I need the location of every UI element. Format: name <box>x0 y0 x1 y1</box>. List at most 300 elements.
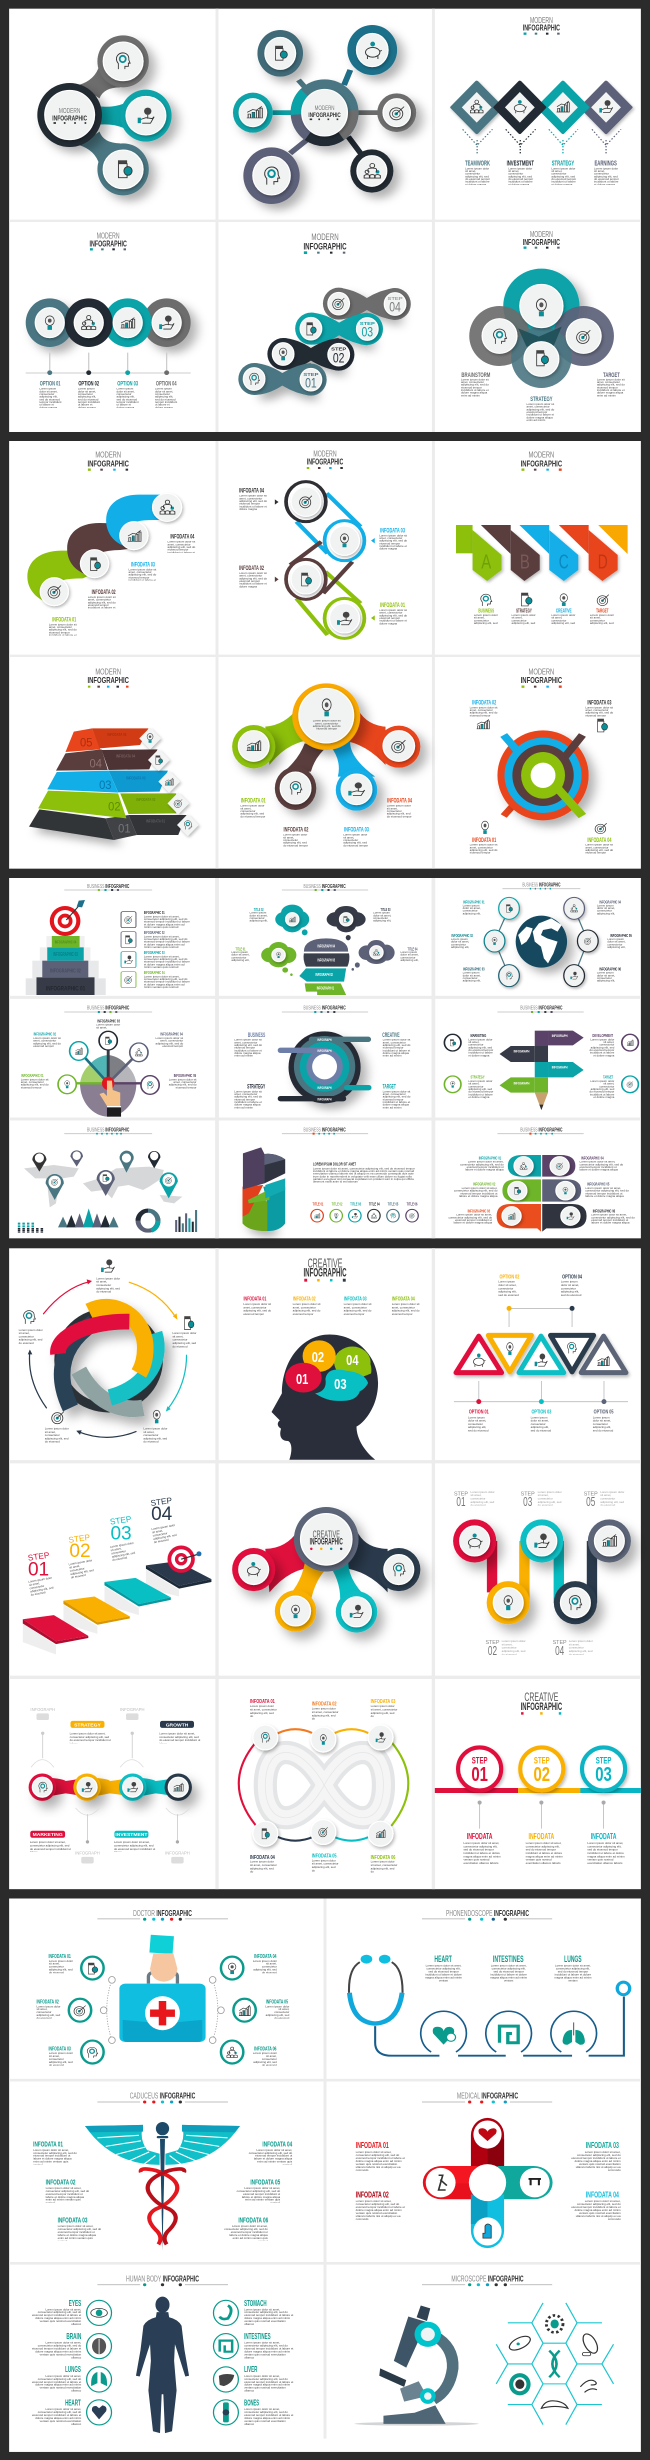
panel: creative hub <box>232 1507 420 1633</box>
panel: woven ribbon star: Lorem ipsum dolor sit amet, consectetur adipiscing elit, sed do eiusmod <box>19 1329 43 1344</box>
title: MEDICAL INFOGRAPHIC <box>457 2091 518 2101</box>
panel: six speech tabs: Lorem ipsum dolor sit amet, consectetur adipiscing elit, sed do eiusmod tempor incididunt ut labore et dolore magna aliqua <box>449 1214 492 1224</box>
panel: doctor bag: INFODATA 01 <box>49 1954 71 1960</box>
panel: woven ribbon star: Lorem ipsum dolor sit amet, consectetur adipiscing elit, sed do eiusmod <box>143 1427 167 1443</box>
icon: body silhouette <box>136 2297 189 2433</box>
chart: people row <box>19 1223 42 1233</box>
panel: caduceus: INFODATA 04 <box>262 2140 293 2148</box>
panel: isometric steps: 03 <box>110 1523 132 1544</box>
panel: medical cross: INFODATA 01 <box>356 2141 389 2150</box>
panel: head with thought clouds: TITLE 03 <box>381 907 391 913</box>
panel: four step dumbbells: 04 <box>389 300 401 315</box>
legend: six mini icons: TITLE 02 <box>332 1202 343 1207</box>
panel: four step dumbbells: STEP <box>360 321 375 327</box>
title: INFOGRAPHIC <box>521 676 562 686</box>
title <box>64 884 152 890</box>
panel: medical cross: Lorem ipsum dolor sit amet, consectetur adipiscing elit, sed do eiusmod tempor incididunt ut labore et dolore magna aliqua enim ad minim veniam quis nostrud exercitation ullamco laboris nisi ut aliquip ex ea commodo <box>571 2151 621 2172</box>
panel: pencil signpost: TARGET <box>603 1075 613 1080</box>
panel: five-lobed hub <box>232 683 420 849</box>
panel: four step dumbbells: STEP <box>387 296 403 302</box>
chart: donut <box>138 1211 158 1231</box>
panel: five-lobed hub: INFODATA 01 <box>241 797 266 804</box>
panel: infinity loop: Lorem ipsum dolor sit amet, consectetur adipiscing elit, sed do <box>312 1708 339 1720</box>
title: BUSINESS INFOGRAPHIC <box>303 1127 346 1133</box>
panel: doctor bag: INFODATA 05 <box>266 2000 289 2005</box>
title: MODERN <box>311 232 339 243</box>
title <box>422 2091 552 2103</box>
title: INFOGRAPHIC <box>87 676 129 686</box>
panel: folded ribbon ABCD: STRATEGY <box>516 609 532 614</box>
panel: head with brain: INFODATA 03 <box>344 1297 367 1303</box>
panel: human body: Lorem ipsum dolor sit amet, consectetur adipiscing elit, sed do eiusmod tempor incididunt ut labore et dolore magna aliqua enim ad minim veniam quis nostrud exercitation ullamco <box>244 2408 293 2425</box>
panel: chain of belts: INFODATA 04 <box>239 487 264 494</box>
title: HUMAN BODY INFOGRAPHIC <box>126 2274 199 2283</box>
panel: stethoscope: Lorem ipsum dolor sit amet, consectetur adipiscing elit, sed do eiusmod tempor incididunt ut labore et dolore magna aliqua enim ad minim veniam <box>425 1965 462 1982</box>
title <box>97 1908 228 1921</box>
title <box>521 1691 562 1713</box>
panel: doctor bag <box>36 1908 289 2066</box>
panel: head with thought clouds: TITLE 04 <box>407 947 418 952</box>
panel: infinity loop: INFODATA 01 <box>250 1699 275 1705</box>
title: INFOGRAPHIC <box>521 459 562 469</box>
panel: infinity loop: Lorem ipsum dolor sit amet, consectetur adipiscing elit, sed do <box>371 1705 397 1718</box>
panel: six-node hub: INFOGRAPHIC <box>308 111 341 119</box>
chart: bars <box>176 1210 196 1232</box>
panel: overlapping circles: STRATEGY <box>530 395 553 403</box>
panel: head with brain: Lorem ipsum dolor sit amet, consectetur adipiscing elit, sed do eiusmod tempor <box>344 1303 371 1316</box>
panel: concentric rings with bars: Lorem ipsum dolor sit amet, consectetur adipiscing elit, sed do eiusmod tempor incididunt ut labore et dolore magna aliqua enim ad minim <box>383 1091 410 1109</box>
panel: three steps on a line <box>435 1691 641 1873</box>
panel: medical cross: INFODATA 04 <box>586 2190 619 2199</box>
title <box>97 2091 228 2103</box>
panel: alternating triangles: OPTION 03 <box>531 1410 552 1416</box>
title <box>521 451 562 470</box>
icons: organ glyphs <box>91 2305 234 2422</box>
panel: infinity loop: INFODATA 05 <box>312 1853 337 1859</box>
title: INFOGRAPHIC <box>303 241 347 252</box>
panel: human body <box>30 2274 296 2433</box>
title <box>97 2274 228 2286</box>
panel: five-lobed hub: Lorem ipsum dolor sit amet, consectetur adipiscing elit, sed do eiusmod tempor <box>343 834 368 847</box>
title: BUSINESS INFOGRAPHIC <box>522 882 561 888</box>
panel: caduceus: INFODATA 05 <box>250 2178 281 2186</box>
title: MODERN <box>530 230 553 239</box>
panel: snake path of five steps: STEP <box>521 1491 535 1497</box>
panel: infinity loop <box>239 1699 408 1873</box>
icon: medical bag held by hand <box>119 1935 206 2042</box>
panel: isometric steps: STEP <box>150 1495 173 1508</box>
panel: four diamonds: STRATEGY <box>552 159 574 167</box>
panel: four-node line with pills: INFOGRAPH <box>165 1850 190 1855</box>
panel: layered pyramid: 04 <box>90 757 102 770</box>
icon: pressing hand <box>99 1081 121 1117</box>
panel: isometric steps: Lorem ipsum dolor sit amet, consectetur adipiscing elit, sed do eiusmod <box>151 1524 177 1544</box>
panel: pencil signpost: Lorem ipsum dolor sit amet, consectetur adipiscing elit, sed do eiusmod tempor incididunt ut labore et dolore magna <box>468 1080 493 1099</box>
panel: stethoscope <box>349 1908 630 2056</box>
panel: four-circle molecule <box>37 35 172 195</box>
panel: six-node hub <box>233 25 416 204</box>
panel: head with brain: 01 <box>296 1371 308 1388</box>
panel: stepped waves: INFODATA 03 <box>131 561 155 568</box>
title: MICROSCOPE INFOGRAPHIC <box>451 2274 524 2283</box>
panel: staircase to target: INFOGRAPHIC 01 <box>46 985 85 992</box>
panel: isometric steps <box>23 1495 211 1655</box>
panel: medical cross: INFODATA 02 <box>356 2190 389 2199</box>
panel: three steps on a line: 01 <box>471 1763 488 1786</box>
title: BUSINESS INFOGRAPHIC <box>87 1127 130 1133</box>
panel: four step dumbbells <box>238 232 411 396</box>
panel: isometric steps: STEP <box>68 1532 91 1545</box>
panel: folded ribbon ABCD: B <box>520 551 530 573</box>
panel: isometric steps: STEP <box>109 1514 132 1527</box>
panel: isometric steps: STEP <box>27 1550 50 1563</box>
section: business infographics <box>9 878 641 1238</box>
title <box>90 232 127 249</box>
panel: six speech tabs: Lorem ipsum dolor sit amet, consectetur adipiscing elit, sed do eiusmod tempor incididunt ut labore et dolore magna aliqua <box>454 1187 497 1198</box>
title: MODERN <box>97 232 120 240</box>
panel: four diamonds: TEAMWORK <box>465 159 490 167</box>
panel: human body: Lorem ipsum dolor sit amet, consectetur adipiscing elit, sed do eiusmod tempor incididunt ut labore et dolore magna aliqua enim ad minim veniam quis nostrud exercitation ullamco <box>32 2342 81 2359</box>
panel: four diamonds <box>452 16 631 185</box>
panel: folded ribbon ABCD: A <box>481 551 491 573</box>
panel: four-circle molecule: INFOGRAPHIC <box>52 114 87 122</box>
panel: five-lobed hub: INFODATA 04 <box>387 797 412 804</box>
panel: snake path of five steps: 04 <box>555 1644 564 1658</box>
panel: world map with pins and charts <box>19 1127 196 1233</box>
panel: infinity loop: INFODATA 04 <box>250 1855 275 1861</box>
panel: six speech tabs: INFOGRAPHIC 03 <box>468 1209 490 1214</box>
panel: three steps on a line: STEP <box>472 1756 487 1766</box>
panel: medical cross <box>356 2091 621 2248</box>
title <box>523 16 560 34</box>
panel: snake path of five steps: STEP <box>485 1640 500 1646</box>
title <box>64 1127 152 1134</box>
panel: concentric rings with bars: BUSINESS <box>248 1032 265 1039</box>
legend: six mini icons: TITLE 06 <box>407 1202 418 1207</box>
panel: three steps on a line: INFODATA <box>591 1831 617 1841</box>
panel: layered pyramid <box>29 667 199 840</box>
panel: concentric rings with bars: INFOGRAPH <box>318 1037 332 1042</box>
panel: head with brain <box>243 1256 422 1460</box>
title <box>87 451 129 470</box>
panel: folded ribbon ABCD: C <box>559 551 569 573</box>
legend: six mini icons: TITLE 01 <box>313 1202 323 1207</box>
panel: five-lobed hub: Lorem ipsum dolor sit amet, consectetur adipiscing elit, sed do eiusmod tempor <box>240 805 265 818</box>
panel: alternating triangles: OPTION 04 <box>562 1275 583 1281</box>
section: modern infographics, colourful <box>9 441 641 869</box>
panel: layered pyramid: 02 <box>108 800 121 813</box>
panel: alternating triangles: Lorem ipsum dolor sit amet, consectetur adipiscing elit, sed do eiusmod <box>561 1281 581 1297</box>
panel: overlapping circles: Lorem ipsum dolor sit amet, consectetur adipiscing elit, sed do eiusmod tempor incididunt ut labore et dolore magna aliqua enim ad minim <box>461 379 489 397</box>
panel: human body: Lorem ipsum dolor sit amet, consectetur adipiscing elit, sed do eiusmod tempor incididunt ut labore et dolore magna aliqua enim ad minim veniam quis nostrud exercitation ullamco <box>32 2308 81 2325</box>
title: MODERN <box>95 451 121 460</box>
panel: four-node line with pills <box>29 1707 201 1863</box>
panel: pencil signpost: INFOGRAPH <box>514 1081 529 1085</box>
panel: stepped waves: INFODATA 04 <box>170 533 194 540</box>
panel: alternating triangles: OPTION 05 <box>594 1410 614 1416</box>
panel: doctor bag: INFODATA 03 <box>49 2047 71 2052</box>
panel: four-node line with pills: MARKETING <box>33 1832 63 1838</box>
title <box>307 450 344 468</box>
title: INFOGRAPHIC <box>307 458 344 466</box>
panel: alternating triangles: Lorem ipsum dolor sit amet, consectetur adipiscing elit, sed do eiusmod <box>498 1281 519 1297</box>
title: BUSINESS INFOGRAPHIC <box>303 884 346 890</box>
section: medical infographics <box>9 1898 641 2452</box>
panel: infinity loop: Lorem ipsum dolor sit amet, consectetur adipiscing elit, sed do <box>250 1705 277 1718</box>
panel: caduceus: INFODATA 06 <box>238 2216 269 2224</box>
panel: six-node hub: MODERN <box>315 104 335 112</box>
panel: overlapping circles: TARGET <box>603 371 620 379</box>
panel: chain of belts: Lorem ipsum dolor sit amet, consectetur adipiscing elit, sed do eiusmod tempor incididunt ut labore et dolore magna <box>379 535 407 550</box>
title <box>87 667 129 687</box>
panel: pencil signpost: Lorem ipsum dolor sit amet, consectetur adipiscing elit, sed do eiusmod tempor incididunt ut labore et dolore magna <box>590 1039 614 1057</box>
panel: chain of belts: INFODATA 02 <box>239 565 264 572</box>
panel: head with thought clouds: TITLE 02 <box>254 907 264 913</box>
panel: human body: BRAIN <box>66 2332 81 2341</box>
panel: pencil signpost: STRATEGY <box>471 1075 485 1080</box>
panel: snake path of five steps: 01 <box>456 1495 466 1509</box>
panel: human body: INTESTINES <box>244 2332 271 2341</box>
panel: human body: Lorem ipsum dolor sit amet, consectetur adipiscing elit, sed do eiusmod tempor incididunt ut labore et dolore magna aliqua enim ad minim veniam quis nostrud exercitation ullamco <box>32 2375 81 2392</box>
panel: infinity loop: INFODATA 03 <box>371 1699 396 1705</box>
panel: chain of belts: Lorem ipsum dolor sit amet, consectetur adipiscing elit, sed do eiusmod tempor incididunt ut labore et dolore magna <box>239 495 267 511</box>
panel: four-node line with pills: INFOGRAPH <box>75 1850 100 1855</box>
panel: human body: LUNGS <box>65 2365 81 2374</box>
panel: six speech tabs: INFOGRAPHIC 04 <box>581 1156 604 1161</box>
panel: six speech tabs: Lorem ipsum dolor sit amet, consectetur adipiscing elit, sed do eiusmod tempor incididunt ut labore et dolore magna aliqua <box>585 1187 629 1198</box>
panel: doctor bag: INFODATA 02 <box>36 2000 59 2005</box>
panel: staircase to target: INFOGRAPHIC 01 <box>144 910 165 916</box>
panel: four-option timeline: OPTION 03 <box>117 379 138 387</box>
panel: four diamonds: EARNINGS <box>594 159 617 167</box>
section: creative infographics <box>9 1248 641 1889</box>
panel: four-circle molecule: MODERN <box>59 107 80 115</box>
chart: cylinder <box>243 1147 285 1231</box>
panel: head with thought clouds: INFOGRAPH 03 <box>318 958 335 963</box>
panel: human body: STOMACH <box>244 2298 267 2308</box>
panel: pencil signpost: MARKETING <box>471 1033 486 1039</box>
panel: concentric rings with bars <box>234 1005 415 1109</box>
panel: human body: EYES <box>69 2298 81 2308</box>
panel: five-lobed hub: INFODATA 02 <box>284 826 308 833</box>
panel: concentric rings with bars: INFOGRAPH <box>318 1085 332 1090</box>
panel: four step dumbbells: 03 <box>361 325 373 340</box>
title: PHONENDOSCOPE INFOGRAPHIC <box>446 1908 529 1918</box>
panel: caduceus: INFODATA 01 <box>33 2140 63 2148</box>
panel: three steps on a line: INFODATA <box>529 1831 555 1841</box>
panel: layered pyramid: INFODATA 02 <box>136 797 155 803</box>
title <box>422 1908 552 1921</box>
title: BUSINESS INFOGRAPHIC <box>87 884 130 890</box>
panel: alternating triangles: Lorem ipsum dolor sit amet, consectetur adipiscing elit, sed do eiusmod <box>593 1416 613 1432</box>
panel: folded ribbon ABCD: TARGET <box>596 609 609 614</box>
panel: six speech tabs: INFOGRAPHIC 01 <box>479 1156 501 1161</box>
panel: folded ribbon ABCD <box>456 451 628 624</box>
panel: creative hub: INFOGRAPHIC <box>310 1537 343 1547</box>
panel: stethoscope: Lorem ipsum dolor sit amet, consectetur adipiscing elit, sed do eiusmod tempor incididunt ut labore et dolore magna aliqua enim ad minim veniam <box>554 1965 591 1982</box>
panel: six speech tabs: Lorem ipsum dolor sit amet, consectetur adipiscing elit, sed do eiusmod tempor incididunt ut labore et dolore magna aliqua <box>460 1161 504 1171</box>
panel: caduceus: INFODATA 02 <box>46 2178 76 2186</box>
panel: alternating triangles <box>454 1275 628 1435</box>
panel: four diamonds: INVESTMENT <box>507 159 534 167</box>
panel: caduceus <box>33 2091 293 2251</box>
panel: 3D cylinder chart: Lorem ipsum dolor sit amet, consectetur adipiscing elit, sed do eiusmod tempor incididunt ut labore et dolore magna aliqua enim ad minim veniam quis nostrud exercitation ullamco laboris nisi ut aliquip ex ea commodo consequat duis aute irure dolor in reprehenderit in voluptate velit esse cillum dolore eu fugiat nulla pariatur excepteur sint occaecat cupidatat non proident sunt in culpa qui officia deserunt mollit anim id est laborum <box>313 1168 415 1183</box>
panel: snake path of five steps: 05 <box>586 1495 595 1509</box>
icon: intestines <box>500 2026 518 2043</box>
panel: 3D cylinder chart: LOREM IPSUM DOLOR SIT AMET <box>313 1162 356 1167</box>
panel: staircase to target: INFOGRAPHIC 04 <box>55 940 76 945</box>
panel: staircase to target: INFOGRAPHIC 04 <box>144 970 165 976</box>
panel: alternating triangles: OPTION 01 <box>469 1410 489 1416</box>
panel: chain of belts: INFODATA 03 <box>380 527 405 534</box>
panel: head with thought clouds: INFOGRAPH 04 <box>318 944 335 949</box>
panel: four-node line with pills: INVESTMENT <box>115 1832 147 1838</box>
panel: five-lobed hub: Lorem ipsum dolor sit amet, consectetur adipiscing elit, sed do eiusmod tempor <box>387 805 412 818</box>
panel: alternating triangles: OPTION 02 <box>500 1275 519 1281</box>
title: CREATIVE <box>524 1691 559 1704</box>
panel: five-lobed hub: Lorem ipsum dolor sit amet, consectetur adipiscing elit, sed do eiusmod tempor <box>313 720 341 730</box>
panel: chain of belts <box>239 450 411 638</box>
title: INFOGRAPHIC <box>523 24 560 32</box>
panel: six speech tabs: INFOGRAPHIC 05 <box>587 1182 610 1187</box>
panel: folded ribbon ABCD: BUSINESS <box>478 609 494 614</box>
panel: four step dumbbells: 01 <box>305 376 317 391</box>
panel: human body: Lorem ipsum dolor sit amet, consectetur adipiscing elit, sed do eiusmod tempor incididunt ut labore et dolore magna aliqua enim ad minim veniam quis nostrud exercitation ullamco <box>244 2375 293 2392</box>
panel: four-option timeline: OPTION 02 <box>78 379 99 387</box>
panel: head with brain: INFODATA 04 <box>392 1297 415 1303</box>
panel: head with thought clouds: TITLE 01 <box>235 947 246 952</box>
panel: concentric rings with bars: Lorem ipsum dolor sit amet, consectetur adipiscing elit, sed do eiusmod tempor incididunt ut labore et dolore magna aliqua enim ad minim <box>383 1039 410 1057</box>
panel: layered pyramid: INFODATA 05 <box>107 732 126 738</box>
panel: hand pressing fan menu: INFOGRAPHIC 01 <box>21 1073 44 1079</box>
panel: six speech tabs: INFOGRAPHIC 06 <box>593 1209 615 1214</box>
panel: concentric rings with bars: INFOGRAPH <box>318 1097 332 1101</box>
title: BUSINESS INFOGRAPHIC <box>87 1005 130 1011</box>
title: INFOGRAPHIC <box>521 1701 562 1713</box>
icon: microscope <box>354 2305 479 2426</box>
legend: six mini icons <box>311 1202 418 1222</box>
panel: concentric rings with bars: CREATIVE <box>382 1032 400 1039</box>
panel: head with brain: 02 <box>312 1349 324 1366</box>
panel: four-node line with pills: GROWTH <box>166 1722 189 1728</box>
panel: concentric rings with bars: INFOGRAPH <box>318 1048 332 1053</box>
panel: pencil signpost: INFOGRAPH <box>552 1033 568 1038</box>
panel: snake path of five steps: STEP <box>584 1491 598 1497</box>
panel: human body: BONES <box>244 2398 259 2407</box>
icon: infinity symbol <box>265 1752 383 1818</box>
panel: woven ribbon star: Lorem ipsum dolor sit amet, consectetur adipiscing elit, sed do eiusmod <box>172 1332 196 1348</box>
panel: concentric target rings: INFODATA 01 <box>472 837 496 844</box>
panel: medical cross: INFODATA 03 <box>586 2141 619 2150</box>
title: MODERN <box>529 451 554 460</box>
panel: folded ribbon ABCD: CREATIVE <box>556 609 572 614</box>
panel: six speech tabs <box>446 1127 637 1232</box>
panel: four step dumbbells: 02 <box>333 351 344 366</box>
panel: three steps on a line: 03 <box>595 1763 612 1786</box>
panel: head with brain: INFODATA 02 <box>293 1297 316 1303</box>
panel: layered pyramid: INFODATA 03 <box>126 776 146 781</box>
icons: microbes <box>507 2315 600 2408</box>
panel: alternating triangles: Lorem ipsum dolor sit amet, consectetur adipiscing elit, sed do eiusmod <box>531 1416 551 1432</box>
panel: globe with six nodes: INFOGRAPHIC 03 <box>463 967 485 972</box>
icon: lungs <box>563 2022 585 2045</box>
panel: concentric rings with bars: STRATEGY <box>247 1083 265 1090</box>
panel: three steps on a line: STEP <box>534 1756 550 1766</box>
panel: head with brain: INFODATA 01 <box>244 1297 266 1303</box>
title <box>422 2274 552 2286</box>
panel: hand pressing fan menu: INFOGRAPHIC 02 <box>34 1032 56 1037</box>
panel: four-option timeline: OPTION 04 <box>156 379 177 387</box>
panel: globe with six nodes: INFOGRAPHIC 06 <box>599 967 621 972</box>
panel: human body: Lorem ipsum dolor sit amet, consectetur adipiscing elit, sed do eiusmod tempor incididunt ut labore et dolore magna aliqua enim ad minim veniam quis nostrud exercitation ullamco <box>244 2342 293 2359</box>
panel: staircase to target <box>26 884 192 995</box>
panel: isometric steps: Lorem ipsum dolor sit amet, consectetur adipiscing elit, sed do eiusmod <box>28 1577 54 1597</box>
title: MODERN <box>530 16 553 25</box>
panel: medical cross: Lorem ipsum dolor sit amet, consectetur adipiscing elit, sed do eiusmod tempor incididunt ut labore et dolore magna aliqua enim ad minim veniam quis nostrud exercitation ullamco laboris nisi ut aliquip ex ea commodo <box>571 2200 621 2221</box>
panel: human body: HEART <box>65 2398 81 2407</box>
panel: creative hub: CREATIVE <box>313 1530 340 1541</box>
panel: stethoscope: HEART <box>434 1954 452 1964</box>
panel: four-option timeline: OPTION 01 <box>40 379 61 387</box>
panel: overlapping circles: Lorem ipsum dolor sit amet, consectetur adipiscing elit, sed do eiusmod tempor incididunt ut labore et dolore magna aliqua enim ad minim <box>597 379 625 397</box>
panel: concentric target rings: INFODATA 03 <box>587 699 611 706</box>
title <box>303 1256 347 1280</box>
icon: stethoscope tube <box>349 1955 630 2056</box>
panel: snake path of five steps <box>453 1491 631 1658</box>
title <box>303 232 347 253</box>
title: MODERN <box>529 667 554 677</box>
panel: layered pyramid: INFODATA 04 <box>116 754 135 759</box>
panel: four-node line with pills: STRATEGY <box>74 1722 101 1728</box>
panel: concentric rings with bars: Lorem ipsum dolor sit amet, consectetur adipiscing elit, sed do eiusmod tempor incididunt ut labore et dolore magna aliqua enim ad minim <box>234 1039 262 1057</box>
panel: concentric target rings: INFODATA 04 <box>587 837 611 844</box>
panel: isometric steps: 02 <box>69 1541 91 1562</box>
panel: 3D cylinder chart <box>243 1127 418 1231</box>
panel: layered pyramid: 05 <box>80 736 92 749</box>
panel: three steps on a line: Lorem ipsum dolor sit amet, consectetur adipiscing elit, sed do eiusmod tempor incididunt ut labore et dolore magna aliqua enim ad minim veniam quis nostrud exercitation ullamco laboris <box>587 1842 625 1865</box>
panel: infinity loop: INFODATA 02 <box>312 1702 337 1708</box>
panel: stethoscope: LUNGS <box>564 1954 582 1964</box>
panel: pencil signpost <box>444 1005 638 1110</box>
panel: medical cross: Lorem ipsum dolor sit amet, consectetur adipiscing elit, sed do eiusmod tempor incididunt ut labore et dolore magna aliqua enim ad minim veniam quis nostrud exercitation ullamco laboris nisi ut aliquip ex ea commodo <box>356 2200 405 2221</box>
panel: six speech tabs: INFOGRAPHIC 02 <box>473 1182 496 1187</box>
panel: layered pyramid: 03 <box>99 778 112 792</box>
panel: six speech tabs: Lorem ipsum dolor sit amet, consectetur adipiscing elit, sed do eiusmod tempor incididunt ut labore et dolore magna aliqua <box>591 1214 635 1224</box>
panel: head with brain: Lorem ipsum dolor sit amet, consectetur adipiscing elit, sed do eiusmod tempor <box>293 1303 320 1316</box>
panel: globe with six nodes <box>451 882 632 987</box>
panel: head with thought clouds: INFOGRAPH 02 <box>315 972 333 978</box>
title: INFOGRAPHIC <box>90 240 127 248</box>
title: MODERN <box>95 667 121 677</box>
panel: four step dumbbells: STEP <box>303 372 319 378</box>
panel: snake path of five steps: STEP <box>454 1491 468 1497</box>
panel: stepped waves: INFODATA 01 <box>52 616 76 623</box>
legend: six mini icons: TITLE 03 <box>350 1202 361 1207</box>
panel: infinity loop: INFODATA 06 <box>371 1855 396 1861</box>
panel: doctor bag: INFODATA 06 <box>254 2047 277 2052</box>
icon: heart <box>433 2027 456 2045</box>
title: DOCTOR INFOGRAPHIC <box>133 1908 192 1918</box>
panel: head with brain: Lorem ipsum dolor sit amet, consectetur adipiscing elit, sed do eiusmod tempor <box>392 1303 419 1316</box>
panel: head with brain: 04 <box>346 1352 359 1369</box>
panel: isometric steps: Lorem ipsum dolor sit amet, consectetur adipiscing elit, sed do eiusmod <box>110 1542 135 1562</box>
panel: isometric steps: 01 <box>28 1559 49 1580</box>
panel: globe with six nodes: INFOGRAPHIC 02 <box>451 933 473 939</box>
panel: overlapping circles: BRAINSTORM <box>461 371 490 379</box>
panel: pencil signpost: DEVELOPMENT <box>592 1033 613 1039</box>
panel: three steps on a line: INFODATA <box>467 1831 493 1841</box>
title <box>502 882 580 889</box>
